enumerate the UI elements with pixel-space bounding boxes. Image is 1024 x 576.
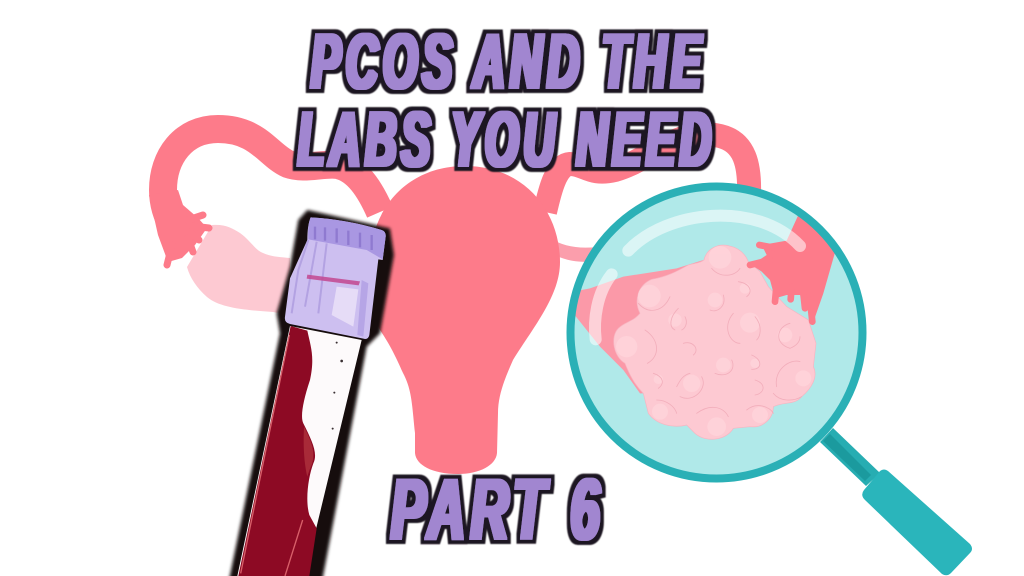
lens ring (570, 186, 862, 478)
lens (570, 186, 862, 478)
left fallopian tube (163, 129, 380, 228)
title line 1: PCOS AND THE (311, 17, 706, 105)
blood test tube (228, 210, 394, 576)
tube reflections (241, 335, 303, 576)
glare highlights (595, 216, 800, 339)
blood (238, 326, 317, 576)
fimbriae (750, 215, 837, 322)
uterus body (370, 166, 560, 474)
tube shadow (228, 210, 394, 576)
uterus illustration (149, 129, 749, 474)
magnifying glass (570, 186, 972, 575)
glass tube (237, 326, 362, 576)
specks in serum (332, 342, 343, 430)
right ligament (550, 238, 610, 262)
left fimbriae (149, 190, 209, 265)
magnifier handle (820, 428, 972, 575)
title (298, 17, 716, 183)
left ovary (187, 225, 290, 313)
part label: PART 6 (391, 462, 605, 558)
right fallopian tube (545, 134, 749, 212)
purple cap (285, 217, 386, 339)
magnified ovary (573, 215, 837, 439)
cyst cluster (614, 245, 816, 439)
ovary backing (573, 260, 703, 393)
